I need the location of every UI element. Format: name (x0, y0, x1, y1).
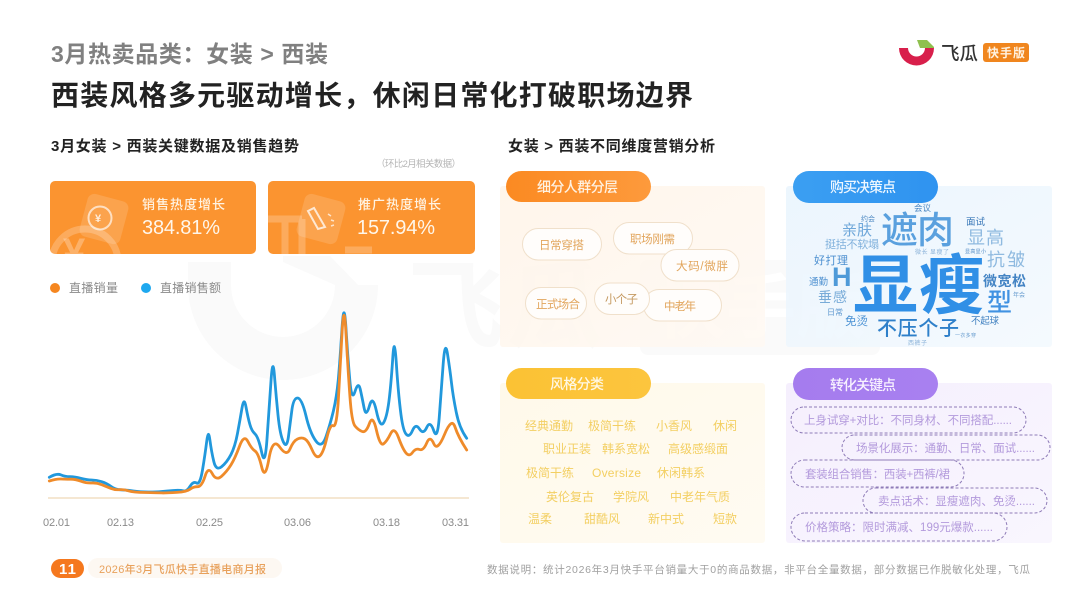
panel: style categories: Oversize (592, 466, 641, 480)
panel: conversion key points: 转化关键点 (830, 377, 896, 393)
panel: purchase decision word cloud: 显高 (967, 228, 1004, 248)
panel: audience segments: 细分人群分层 (537, 179, 618, 195)
panel: style categories: 短款 (713, 512, 737, 526)
logo: 快手版 (987, 45, 1025, 60)
chart legend: 直播销量 (69, 281, 118, 295)
panel: purchase decision word cloud: 约会 (861, 214, 875, 223)
tag: petite (594, 283, 650, 314)
report name (88, 558, 282, 578)
tag: daily wear (522, 228, 602, 260)
panel: purchase decision word cloud: 会议 (914, 203, 931, 213)
KPI card: sales heat (50, 181, 256, 254)
panel: style categories: 新中式 (648, 511, 684, 526)
panel: purchase decision word cloud: 不压个子 (877, 317, 959, 340)
page number: 11 (59, 561, 76, 578)
panel: style categories: 职业正装 (543, 442, 591, 456)
panel: style categories: 小香风 (656, 419, 692, 433)
panel: purchase decision word cloud: 微长 显瘦了 (915, 248, 949, 256)
KPI card: sales heat: ¥ (63, 231, 86, 275)
item: selling points script: 卖点话术：显瘦遮肉、免烫...... (878, 494, 1035, 508)
line chart: sales trend: 02.25 (196, 517, 223, 529)
tag: middle-aged (644, 290, 722, 321)
category heading: 3月热卖品类：女装 > 西装 (51, 41, 328, 67)
panel: purchase decision word cloud: 挺括不软塌 (825, 237, 879, 251)
panel: style categories: 休闲韩系 (657, 465, 705, 480)
logo: 飞瓜 (941, 43, 978, 64)
panel: purchase decision word cloud: 免烫 (845, 314, 868, 328)
line chart: sales trend: 02.13 (107, 517, 134, 529)
KPI card: promotion heat: 推广热度增长 (358, 197, 441, 212)
tag: workplace: 职场刚需 (630, 232, 675, 246)
panel: style categories: 学院风 (613, 489, 649, 504)
tag: workplace (614, 222, 692, 254)
panel: purchase decision word cloud: 面试 (966, 216, 985, 228)
report name: 2026年3月飞瓜快手直播电商月报 (99, 562, 266, 576)
tag: petite: 小个子 (605, 293, 638, 306)
KPI card: sales heat: 384.81% (142, 217, 220, 239)
panel: purchase decision word cloud: H (832, 262, 852, 292)
tag: middle-aged: 中老年 (664, 299, 696, 313)
panel: purchase decision word cloud: 显高显小 (965, 248, 986, 255)
panel: style categories: 经典通勤 (525, 419, 573, 433)
tag: plus size: 大码/微胖 (676, 259, 728, 273)
item: pricing strategy (791, 513, 1007, 541)
panel: conversion key points (786, 368, 1052, 543)
KPI card: promotion heat: 157.94% (357, 217, 435, 239)
line chart: sales trend: 03.18 (373, 517, 400, 529)
panel: purchase decision word cloud: 垂感 (818, 289, 847, 305)
tag: plus size (661, 250, 739, 281)
panel: purchase decision word cloud (786, 171, 1052, 347)
item: selling points script (863, 488, 1047, 513)
KPI card: sales heat: ¥ (95, 213, 102, 225)
panel: purchase decision word cloud: 通勤 (809, 276, 828, 288)
panel: audience segments (500, 171, 765, 347)
data note: 数据说明：统计2026年3月快手平台销量大于0的商品数据，非平台全量数据，部分数据已作脱敏化处理，飞瓜 (487, 563, 1030, 576)
KPI card: sales heat: 销售热度增长 (142, 197, 225, 212)
chart legend (50, 280, 221, 295)
tag: daily wear: 日常穿搭 (539, 238, 584, 252)
KPI card: promotion heat (268, 181, 475, 254)
panel: purchase decision word cloud: 日常 (827, 308, 843, 317)
watermark: Feigua logo: 飞瓜 (408, 254, 603, 361)
line chart: sales trend: 03.31 (442, 517, 469, 529)
line chart: sales trend: 03.06 (284, 517, 311, 529)
panel: purchase decision word cloud: 不起球 (971, 315, 999, 327)
tag: formal occasions (526, 288, 586, 319)
item: set bundle sales (791, 460, 964, 487)
panel: style categories: 甜酷风 (584, 512, 620, 526)
panel: style categories: 英伦复古 (546, 489, 594, 504)
right section heading: 女装 > 西装不同维度营销分析 (508, 137, 715, 155)
panel: purchase decision word cloud: 购买决策点 (830, 179, 896, 195)
panel: purchase decision word cloud: 型 (987, 289, 1012, 317)
panel: style categories: 风格分类 (550, 376, 604, 392)
tag: formal occasions: 正式场合 (536, 297, 580, 311)
item: try-on comparison (791, 407, 1026, 433)
item: scenario display (842, 435, 1050, 460)
panel: purchase decision word cloud: 西裤子 (908, 339, 927, 347)
panel: style categories: 休闲 (713, 419, 737, 433)
panel: style categories (500, 368, 765, 543)
page number (51, 559, 84, 578)
panel: purchase decision word cloud: 一衣多穿 (955, 332, 976, 339)
chart legend: 直播销售额 (160, 280, 221, 295)
main title: 西装风格多元驱动增长，休闲日常化打破职场边界 (51, 80, 693, 111)
panel: purchase decision word cloud: 微宽松 (983, 273, 1026, 289)
panel: style categories: 中老年气质 (670, 489, 730, 504)
item: pricing strategy: 价格策略：限时满减、199元爆款...... (805, 520, 993, 534)
panel: purchase decision word cloud: 遮肉 (881, 210, 954, 251)
line chart: sales trend: 02.01 (43, 517, 70, 529)
left section heading: 3月女装 > 西装关键数据及销售趋势 (51, 137, 299, 155)
item: set bundle sales: 套装组合销售：西装+西裤/裙 (805, 467, 950, 481)
item: scenario display: 场景化展示：通勤、日常、面试...... (856, 441, 1035, 455)
note: compared with February: （环比2月相关数据） (376, 158, 461, 170)
panel: style categories: 温柔 (528, 512, 552, 526)
panel: style categories: 极简干练 (588, 418, 636, 433)
item: try-on comparison: 上身试穿+对比：不同身材、不同搭配...... (804, 413, 1012, 427)
panel: style categories: 韩系宽松 (602, 441, 650, 456)
panel: purchase decision word cloud: 抗皱 (987, 250, 1025, 270)
panel: purchase decision word cloud: 显瘦 (853, 249, 984, 322)
logo (899, 40, 1029, 66)
line chart: sales trend (43, 313, 469, 529)
panel: purchase decision word cloud: 好打理 (814, 253, 848, 267)
panel: style categories: 高级感缎面 (668, 441, 728, 456)
watermark: Feigua logo: 快手版 (656, 269, 866, 347)
panel: purchase decision word cloud: 年会 (1013, 291, 1025, 299)
watermark: Feigua logo (188, 254, 880, 380)
panel: style categories: 极简干练 (526, 465, 574, 480)
panel: purchase decision word cloud: 亲肤 (842, 222, 872, 239)
